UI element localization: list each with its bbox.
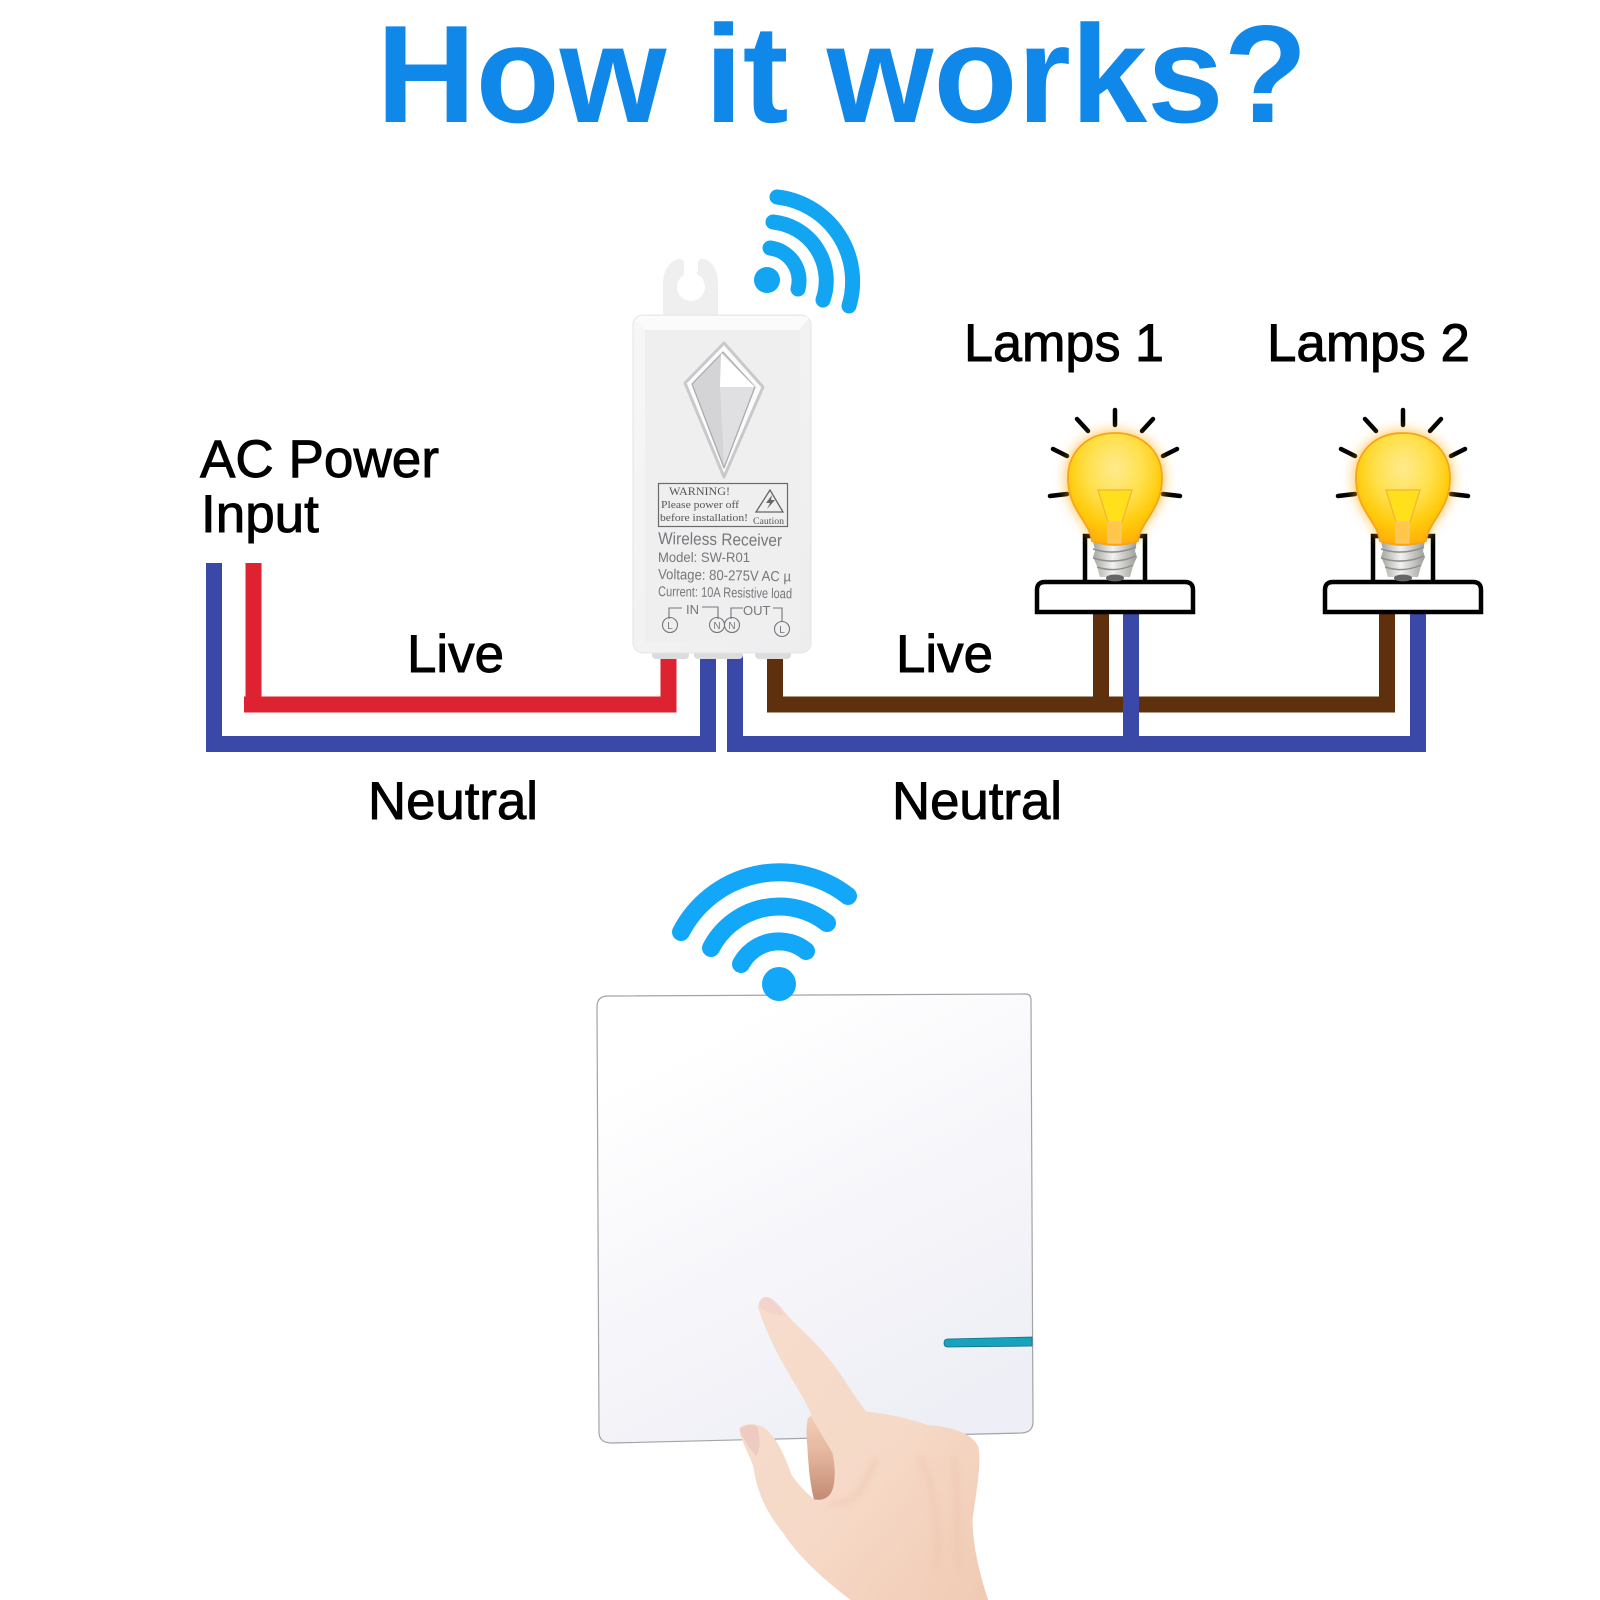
switch indicator light <box>944 1337 1032 1347</box>
wall switch panel <box>597 994 1033 1443</box>
wires: input live (red) <box>244 563 668 704</box>
terminal markings: L <box>779 625 785 636</box>
thumbnail <box>740 1425 760 1457</box>
terminal markings <box>662 602 790 636</box>
warning box: Please power off <box>661 499 739 511</box>
label: Live (output side): Live <box>896 625 993 684</box>
wires: input neutral (blue) <box>214 563 708 744</box>
terminal markings: L <box>667 621 673 632</box>
warning box: Caution <box>753 517 784 527</box>
warning box <box>658 484 788 527</box>
icon: switch wifi signal <box>681 872 848 1001</box>
icon: receiver wifi signal <box>754 197 853 306</box>
warning box: WARNING! <box>669 484 730 498</box>
mounting clip <box>663 255 718 318</box>
label: AC Power Input <box>200 430 439 544</box>
rays <box>1338 410 1468 496</box>
socket <box>1085 536 1145 581</box>
receiver specifications: Model: SW-R01 <box>658 549 750 565</box>
curled finger <box>807 1416 835 1500</box>
terminal markings: IN <box>686 602 699 617</box>
palm shading <box>830 1457 960 1570</box>
terminal markings: OUT <box>743 603 770 618</box>
label: Neutral (output side): Neutral <box>892 772 1062 831</box>
lamp 2 <box>1325 410 1481 612</box>
lamp 1 <box>1037 410 1193 612</box>
index fingernail <box>759 1297 784 1315</box>
label: Lamps 1: Lamps 1 <box>964 314 1164 373</box>
screw cap <box>1093 541 1137 582</box>
rays <box>1050 410 1180 496</box>
label: Lamps 2: Lamps 2 <box>1267 314 1470 373</box>
label: AC Power Input: AC Power <box>200 430 439 489</box>
receiver specifications: Voltage: 80-275V AC µ <box>658 567 792 585</box>
title: How it works? <box>376 0 1308 152</box>
bulb glass <box>1068 433 1162 545</box>
receiver body <box>633 315 811 653</box>
label: Neutral (input side): Neutral <box>368 772 538 831</box>
warning box: before installation! <box>660 512 748 524</box>
lamp base <box>1037 582 1193 612</box>
diamond logo <box>685 343 763 477</box>
terminal markings: N <box>728 621 736 632</box>
glow <box>1066 431 1164 538</box>
label: Live (input side): Live <box>407 625 504 684</box>
socket <box>1373 536 1433 581</box>
terminal markings: N <box>713 621 721 632</box>
wires: output neutral (blue) <box>735 614 1418 752</box>
label: AC Power Input: Input <box>201 485 319 544</box>
receiver specifications: Current: 10A Resistive load <box>658 583 792 601</box>
glow <box>1354 431 1452 538</box>
wires: output live (brown) <box>775 614 1387 704</box>
hand pressing the switch <box>739 1297 988 1600</box>
receiver specifications: Wireless Receiver <box>658 529 783 550</box>
connector ports <box>652 648 791 659</box>
receiver specifications <box>658 529 792 601</box>
wireless receiver device <box>633 255 811 659</box>
palm, fingers and thumb <box>739 1297 988 1600</box>
lamp base <box>1325 582 1481 612</box>
screw cap <box>1381 541 1425 582</box>
bulb glass <box>1356 433 1450 545</box>
